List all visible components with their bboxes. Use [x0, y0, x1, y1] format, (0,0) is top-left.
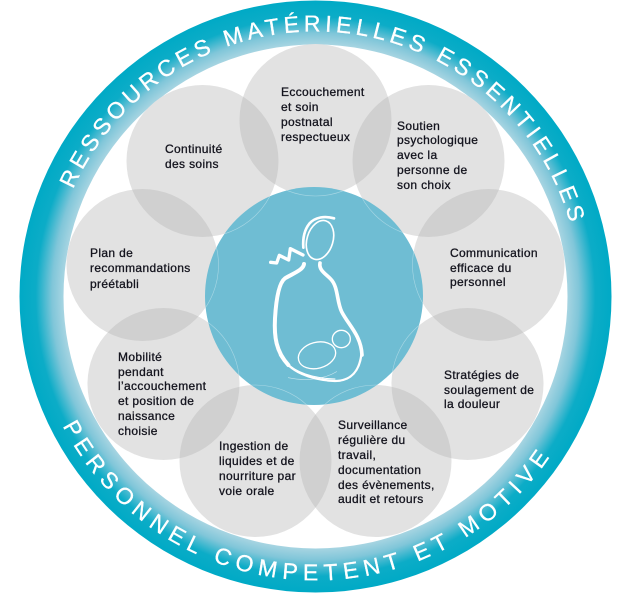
label: Ingestion: voie orale	[219, 484, 275, 498]
label: Communication: Communication	[450, 246, 538, 260]
label: Plan: recommandations	[90, 261, 191, 275]
label: Soutien: psychologique	[397, 133, 478, 147]
hair strand	[271, 249, 303, 263]
label: Surveillance: des évènements,	[338, 478, 435, 492]
petal circles	[66, 44, 564, 537]
ring label: top: RESSOURCES MATÉRIELLES ESSENTIELLES	[59, 12, 584, 221]
body lower	[280, 355, 361, 381]
label: Eccouchement: postnatal	[281, 115, 333, 129]
label: Mobilité: pendant	[118, 365, 164, 379]
label: Communication: personnel	[450, 275, 506, 289]
floor lines	[288, 372, 337, 379]
label: Mobilité: l’accouchement	[118, 379, 207, 393]
label: Continuité: des soins	[165, 157, 219, 171]
label: Stratégies: la douleur	[444, 397, 500, 411]
label: Soutien: Soutien	[397, 119, 440, 133]
label: Mobilité: et position de	[118, 394, 194, 408]
label: Eccouchement: et soin	[281, 100, 319, 114]
label: Eccouchement: Eccouchement	[281, 85, 365, 99]
center circle	[205, 187, 423, 405]
label: Surveillance: audit et retours	[338, 492, 424, 506]
baby body	[295, 338, 339, 373]
label: Surveillance: documentation	[338, 463, 421, 477]
head	[302, 217, 338, 263]
label: Ingestion: Ingestion de	[219, 439, 289, 453]
label: Soutien: personne de	[397, 163, 468, 177]
label: Stratégies: Stratégies de	[444, 368, 519, 382]
label: Plan: Plan de	[90, 246, 133, 260]
label: Plan: préétabli	[90, 277, 139, 291]
label: Mobilité: choisie	[118, 424, 158, 438]
label: Ingestion: nourriture par	[219, 469, 296, 483]
label: Eccouchement: respectueux	[281, 130, 350, 144]
label: Soutien: son choix	[397, 178, 451, 192]
body right side	[320, 263, 362, 355]
hair	[303, 217, 334, 248]
ring label: bottom: PERSONNEL COMPETENT ET MOTIVE	[63, 420, 550, 580]
body left side	[275, 264, 304, 365]
icon: pregnant woman line drawing	[271, 217, 362, 381]
label: Mobilité: naissance	[118, 409, 175, 423]
label: Mobilité: Mobilité	[118, 350, 162, 364]
label: Surveillance: travail,	[338, 448, 376, 462]
label: Soutien: avec la	[397, 148, 437, 162]
label: Ingestion: liquides et de	[219, 454, 295, 468]
label: Surveillance: Surveillance	[338, 418, 408, 432]
label: Surveillance: régulière du	[338, 433, 406, 447]
baby head	[332, 330, 350, 348]
label: Stratégies: soulagement de	[444, 383, 534, 397]
label: Communication: efficace du	[450, 261, 512, 275]
label: Continuité: Continuité	[165, 142, 223, 156]
